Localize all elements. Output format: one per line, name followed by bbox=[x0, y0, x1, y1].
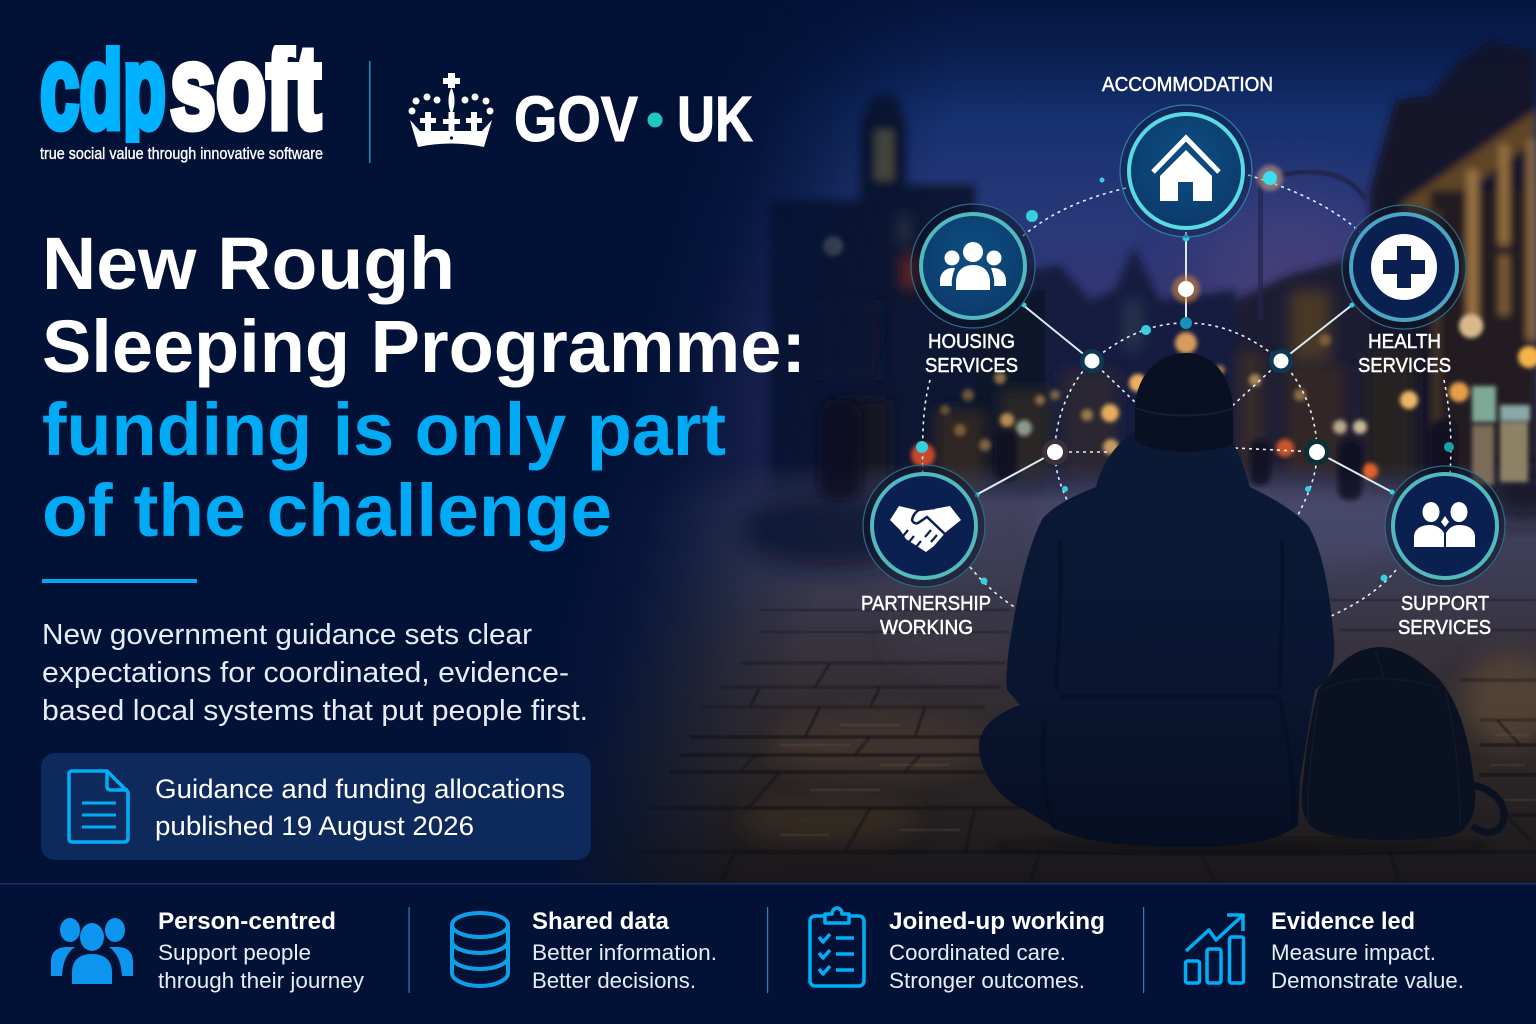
icon: people bbox=[51, 918, 133, 984]
backpack bbox=[1302, 647, 1504, 840]
bottom strip bbox=[0, 883, 1536, 1024]
logo: GOV.UK wordmark: UK bbox=[677, 83, 753, 155]
title bbox=[42, 222, 806, 552]
title: Sleeping Programme: bbox=[42, 305, 806, 388]
network connectors bbox=[923, 175, 1451, 616]
person sitting, seen from behind bbox=[979, 353, 1504, 854]
feature: person-centred: Support people bbox=[158, 940, 311, 965]
navy fade into left panel bbox=[560, 0, 920, 883]
feature: joined-up working bbox=[810, 908, 1105, 993]
logo: cdpsoft: true social value through innovative software bbox=[40, 145, 323, 163]
feature: person-centred bbox=[51, 908, 364, 993]
cobblestones bbox=[640, 600, 1536, 883]
feature: person-centred: through their journey bbox=[158, 968, 364, 993]
title: New Rough bbox=[42, 222, 455, 305]
intro text bbox=[42, 619, 588, 727]
logo divider bbox=[369, 61, 370, 163]
feature: joined-up working: Coordinated care. bbox=[889, 940, 1066, 965]
feature: evidence led: Demonstrate value. bbox=[1271, 968, 1464, 993]
logo: GOV.UK wordmark bbox=[514, 83, 753, 155]
far buildings bbox=[770, 40, 1536, 500]
feature: joined-up working: Joined-up working bbox=[889, 908, 1105, 935]
logo: crown bbox=[408, 73, 494, 147]
feature: evidence led bbox=[1186, 908, 1464, 993]
label: support services: SERVICES bbox=[1398, 617, 1491, 639]
title: of the challenge bbox=[42, 469, 612, 552]
network nodes bbox=[916, 165, 1454, 584]
logo: GOV.UK wordmark: GOV bbox=[514, 83, 638, 155]
icon: document bbox=[69, 771, 128, 842]
feature: shared data: Shared data bbox=[532, 908, 670, 935]
intro text: based local systems that put people first. bbox=[42, 695, 588, 727]
intro text: New government guidance sets clear bbox=[42, 619, 532, 651]
callout: publication date: published 19 August 2026 bbox=[155, 811, 474, 841]
service labels bbox=[861, 74, 1491, 639]
label: housing services: SERVICES bbox=[925, 355, 1018, 377]
outer dashed ring bbox=[923, 175, 1451, 616]
service icon: health services bbox=[1342, 205, 1466, 329]
callout: publication date: Guidance and funding allocations bbox=[155, 774, 565, 804]
label: support: SUPPORT bbox=[1401, 593, 1489, 615]
jacket folds bbox=[1043, 540, 1293, 830]
label: partnership: PARTNERSHIP bbox=[861, 593, 991, 615]
label: health services: SERVICES bbox=[1358, 355, 1451, 377]
logo: cdpsoft bbox=[40, 45, 322, 163]
solid spokes bbox=[976, 232, 1392, 495]
label: health: HEALTH bbox=[1368, 331, 1441, 353]
title rule bbox=[42, 579, 197, 583]
callout: publication date bbox=[41, 753, 591, 860]
service icon: accommodation bbox=[1120, 105, 1252, 237]
jacket and legs bbox=[979, 430, 1334, 847]
background photo: night street bbox=[560, 0, 1536, 883]
feature: shared data: Better information. bbox=[532, 940, 717, 965]
service icon: housing services bbox=[911, 204, 1035, 328]
feature: evidence led: Measure impact. bbox=[1271, 940, 1436, 965]
service icon: support services bbox=[1385, 466, 1505, 586]
icon: growth chart bbox=[1186, 915, 1244, 983]
feature: joined-up working: Stronger outcomes. bbox=[889, 968, 1085, 993]
pedestrians bbox=[818, 400, 1456, 500]
feature: shared data bbox=[452, 908, 717, 993]
icon: clipboard checklist bbox=[810, 908, 864, 986]
stone highlights bbox=[780, 725, 1535, 835]
beanie bbox=[1135, 353, 1233, 452]
label: housing: HOUSING bbox=[928, 331, 1015, 353]
service icon: partnership working bbox=[863, 465, 985, 587]
logo: cdpsoft: soft bbox=[170, 22, 321, 154]
street surface bbox=[560, 462, 1536, 883]
feature: shared data: Better decisions. bbox=[532, 968, 696, 993]
intro text: expectations for coordinated, evidence- bbox=[42, 657, 569, 689]
label: working: WORKING bbox=[880, 617, 973, 639]
bokeh lights bbox=[823, 236, 1536, 485]
feature: person-centred: Person-centred bbox=[158, 908, 336, 935]
icon: database bbox=[452, 913, 508, 986]
lit shopfronts bbox=[820, 215, 1415, 490]
label: accommodation: ACCOMMODATION bbox=[1102, 74, 1273, 96]
title: funding is only part bbox=[42, 388, 726, 471]
logo: cdpsoft: cdp bbox=[40, 22, 166, 154]
feature: evidence led: Evidence led bbox=[1271, 908, 1415, 935]
